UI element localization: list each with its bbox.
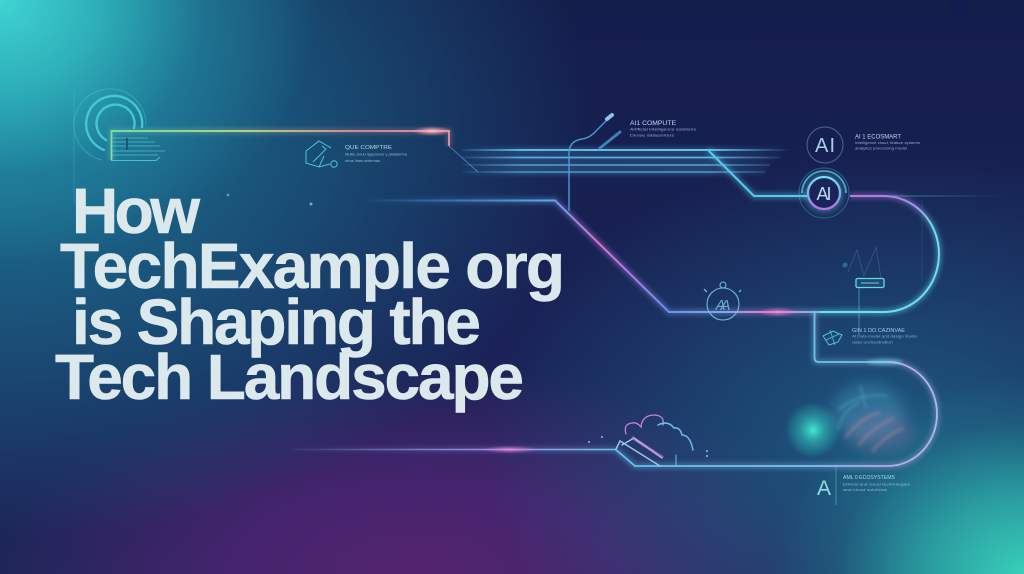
top-right dark artifact <box>950 0 968 20</box>
icon: network cluster <box>823 330 842 345</box>
text: top-left caption: otros lines sistemas <box>345 158 380 163</box>
panel: code snippet lines <box>111 138 165 160</box>
text: AI compute caption: Artificial intelligence solutions <box>630 126 696 132</box>
text: bottom right A label: A <box>817 477 831 500</box>
text: top-left caption: Multis cloud ligacionos y plataforma <box>345 152 408 156</box>
text: bottom right A label: Ethical and cloud technologies <box>843 482 910 486</box>
faint vertical guide <box>73 90 75 205</box>
title <box>55 175 565 413</box>
icon: AI circle outline: AI <box>815 135 835 157</box>
text: AI ecosystem caption: Intelligence cloud, feature systems <box>855 140 920 145</box>
icon: stopwatch AI node <box>704 282 741 320</box>
icon: glowing AI node: AI <box>816 184 832 204</box>
icon: cloud and layers <box>616 415 693 466</box>
icon: concentric signal arcs <box>74 89 146 160</box>
icon: hexagon node <box>306 141 337 167</box>
lower right loop connector <box>615 312 937 466</box>
right loop connector <box>820 196 1005 312</box>
text: top-left caption: QUE COMPTRE <box>345 145 392 151</box>
text: bottom right A label: AML 0 ECOSYSTEMS <box>843 475 895 481</box>
text: network caption <box>852 328 918 344</box>
title: Tech Landscape <box>55 341 524 413</box>
main pink-blue circuit line <box>360 200 820 317</box>
text: AI ecosystem caption: analytics processing model <box>855 146 907 150</box>
decorative sparkle dots <box>227 194 708 457</box>
text: AI compute caption <box>630 120 696 138</box>
icon: glowing AI node <box>799 168 849 218</box>
title: TechExample org <box>60 230 565 302</box>
text: network caption: data orchestration <box>852 340 893 344</box>
parallel data lines <box>462 150 790 172</box>
line into AI node <box>708 150 812 196</box>
top-left circuit line <box>112 126 478 172</box>
text: network caption: Al Data model and design studio <box>852 334 918 338</box>
title: How <box>72 175 200 247</box>
text: AI ecosystem caption: AI 1 ECOSMART <box>855 134 901 140</box>
text: AI compute caption: AI1 COMPUTE <box>630 120 677 127</box>
text: network caption: GIN 1 DO CAZINVAE <box>852 328 905 334</box>
text: AI ecosystem caption <box>855 134 920 150</box>
text: bottom right A label <box>817 467 910 505</box>
icon: AI circle outline <box>807 127 843 163</box>
icon: cable connectors <box>569 115 620 210</box>
icon: glowing energy orb <box>785 384 914 458</box>
text: AI compute caption: Dense datacenters <box>630 132 674 138</box>
title: is Shaping the <box>72 286 481 358</box>
icon: stopwatch AI node: AA <box>714 297 730 314</box>
lower left fading line <box>290 446 615 454</box>
icon: small sparkline and status pill <box>842 247 884 335</box>
text: bottom right A label: and cloud solutions <box>843 487 887 492</box>
text: top-left caption <box>345 145 408 163</box>
